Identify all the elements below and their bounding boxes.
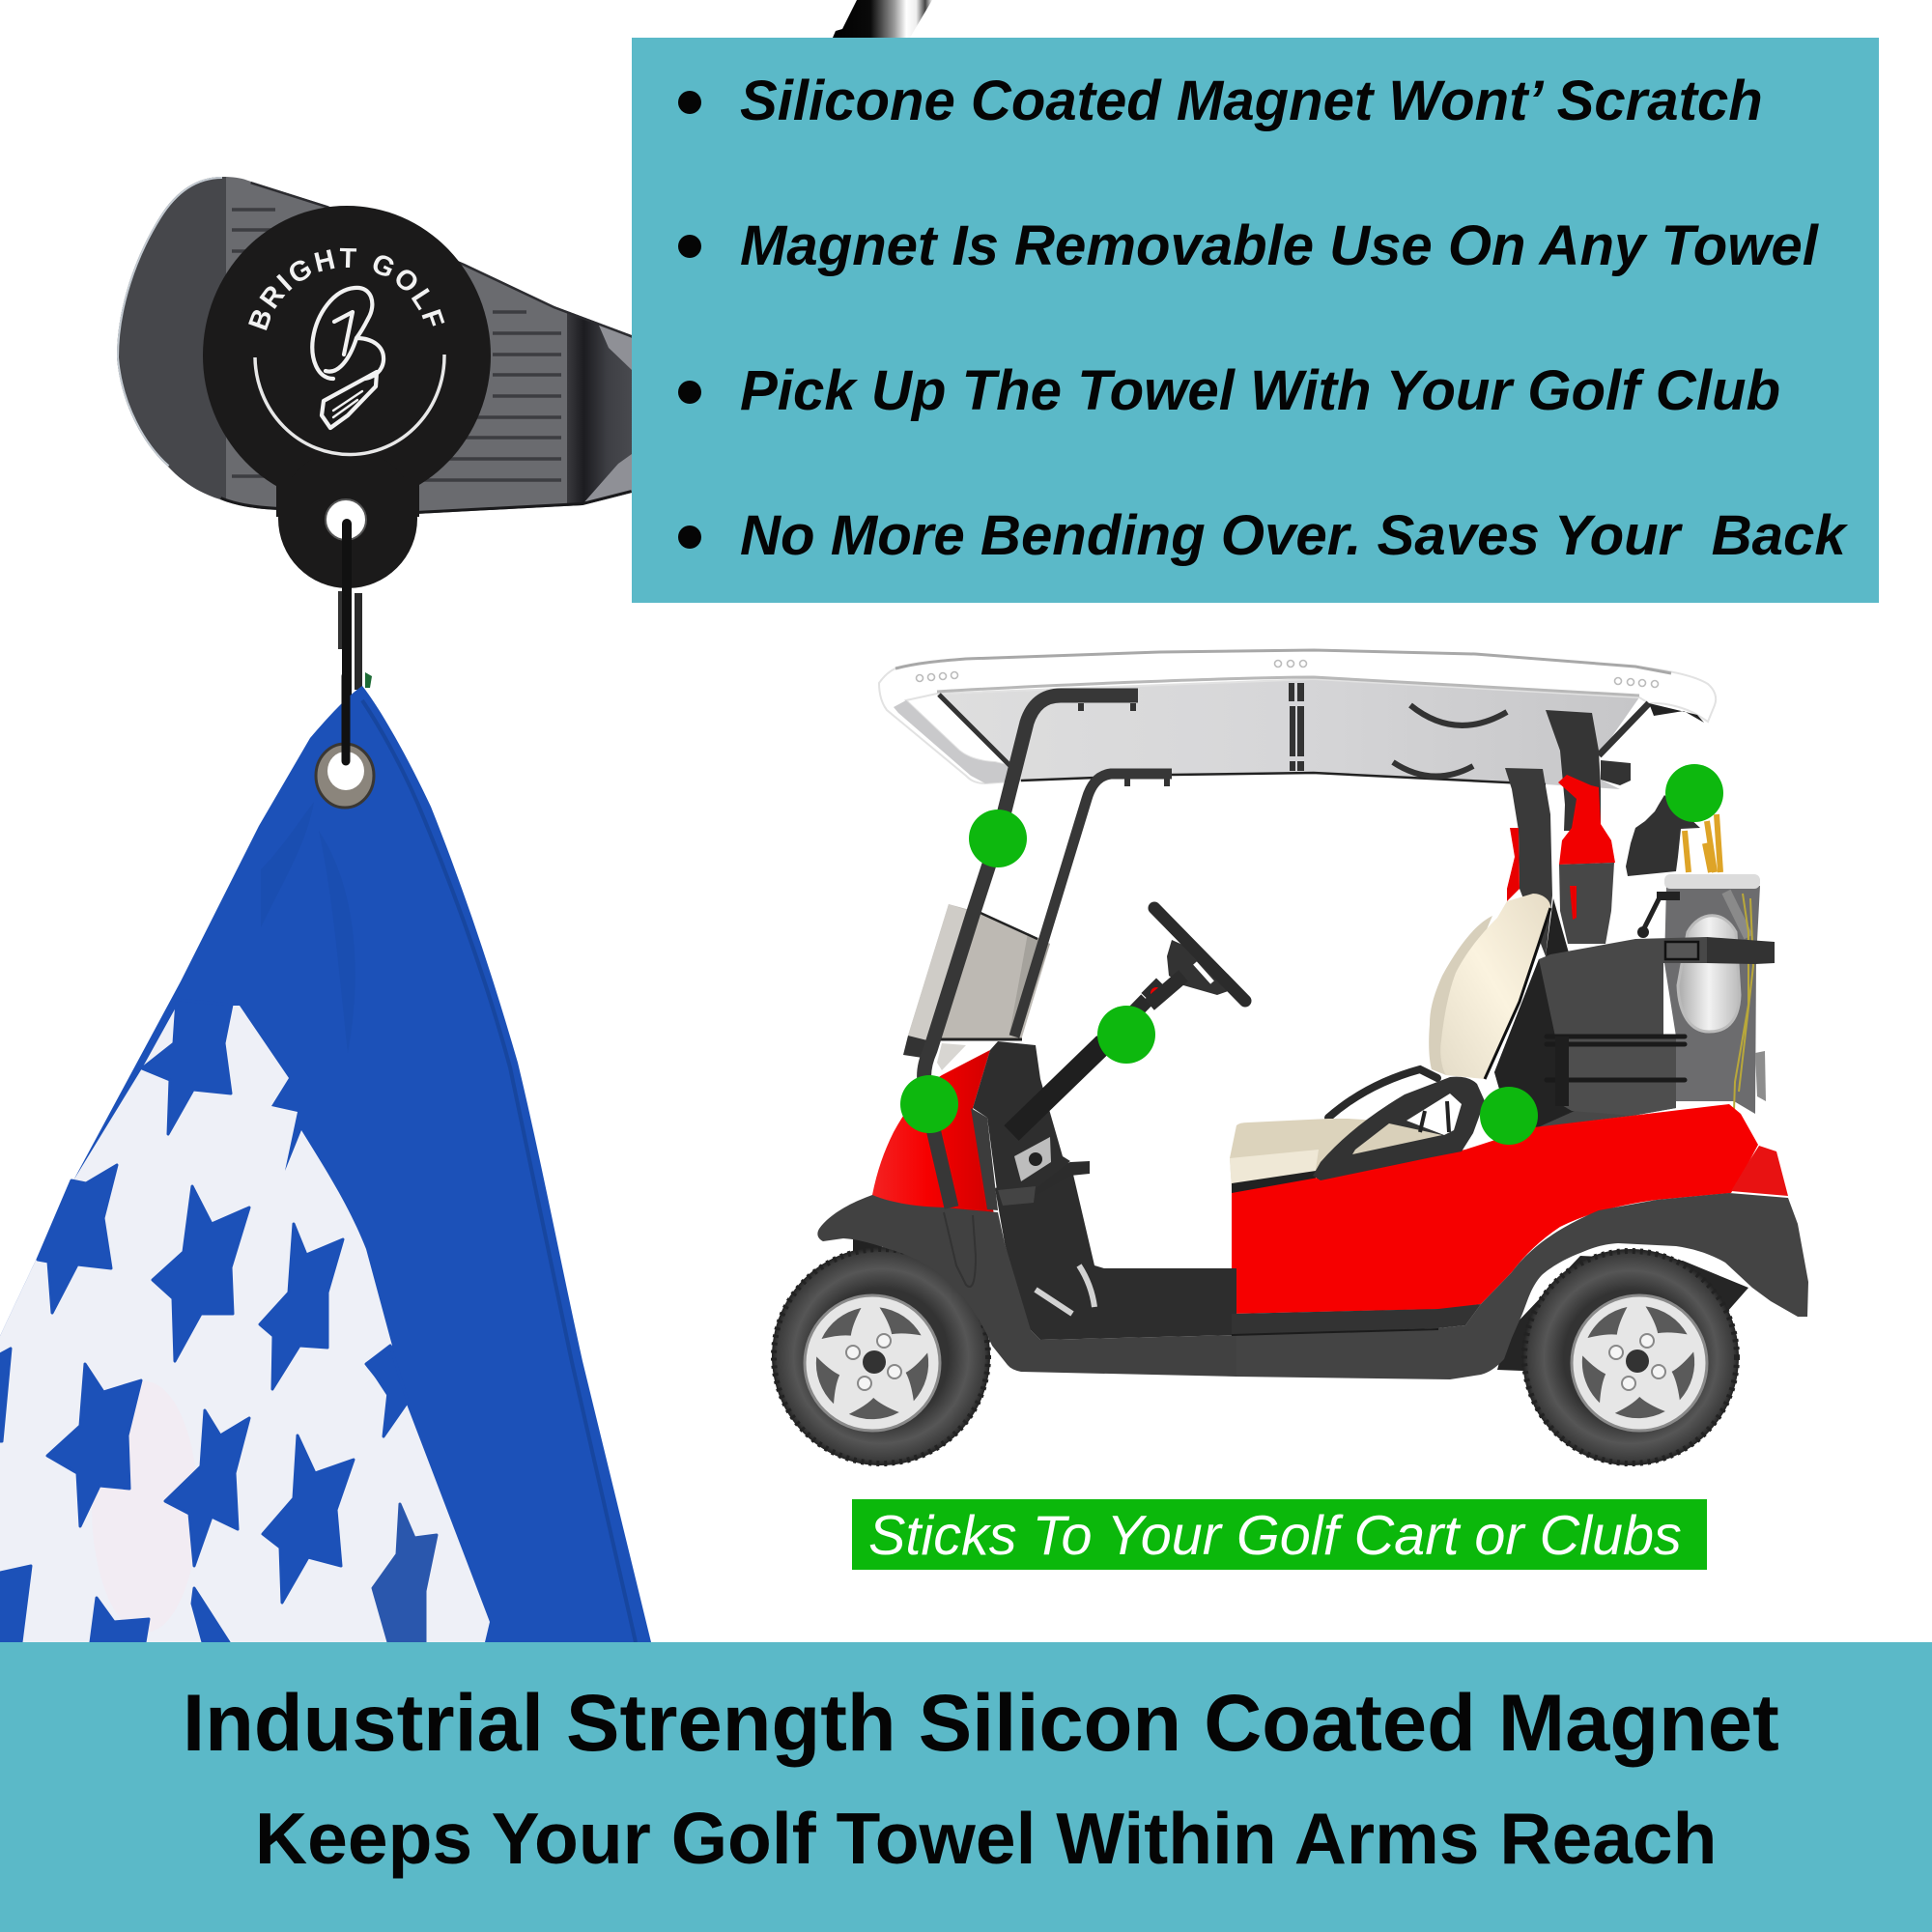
armrest	[1313, 1077, 1485, 1180]
front tire	[772, 1247, 990, 1465]
roof handles	[1393, 705, 1507, 777]
buckle	[1665, 942, 1698, 959]
front red cowl	[872, 1050, 995, 1219]
roof bottom line	[1021, 773, 1546, 784]
seat back	[1440, 894, 1550, 1079]
panel: top benefits	[632, 38, 1879, 603]
roof left inner lip	[894, 700, 1022, 783]
fender seam	[944, 1212, 976, 1287]
panel: bottom banner	[0, 1642, 1932, 1932]
steering wheel	[1154, 908, 1245, 1001]
rear red bit	[1507, 828, 1520, 901]
golf towel	[0, 676, 651, 1642]
roof top highlight line	[895, 650, 1671, 673]
magnet eyelet hole	[326, 499, 366, 540]
rear rim	[1572, 1295, 1707, 1431]
pedals	[1036, 1265, 1094, 1314]
bullet 2	[678, 235, 701, 258]
towel blue body	[0, 686, 651, 1642]
switch panel	[1014, 1137, 1051, 1181]
windshield top edge	[980, 913, 1037, 939]
golf club shafts	[1685, 814, 1720, 872]
windshield lower reflection	[937, 1043, 966, 1070]
front wheel	[772, 1247, 990, 1465]
towel white star field	[0, 1006, 490, 1642]
bullet 1	[678, 91, 701, 114]
callout: sticks to golf cart	[852, 1499, 1707, 1570]
magnet spot steering column	[1097, 1006, 1155, 1064]
windshield glass	[908, 904, 1050, 1040]
benefit 1: Silicone Coated Magnet Wont’ Scratch	[740, 70, 1763, 132]
golf club heads	[1626, 795, 1700, 876]
golf cart illustration	[772, 650, 1808, 1465]
towel stars	[0, 1000, 437, 1642]
golf bag body	[1664, 886, 1760, 1114]
magnet spot seat frame	[1480, 1087, 1538, 1145]
rear red piece	[1731, 1146, 1788, 1196]
roof centre straps	[1289, 683, 1304, 771]
rear wheel	[1522, 1249, 1739, 1465]
bottle	[1559, 863, 1614, 944]
steering button	[1141, 978, 1172, 1009]
seat back rear	[1429, 916, 1492, 1075]
roof underside	[937, 679, 1639, 789]
headline: Industrial Strength Silicon Coated Magnet	[183, 1678, 1779, 1768]
callout text: Sticks To Your Golf Cart or Clubs	[868, 1505, 1682, 1567]
under seat strip	[1232, 1171, 1316, 1200]
script B mark	[312, 288, 384, 428]
bottle strut	[1546, 898, 1570, 956]
golf bag pocket	[1678, 916, 1740, 1032]
red holder	[1558, 775, 1615, 865]
magnet spot cowl	[900, 1075, 958, 1133]
dark sill strip	[1232, 1304, 1481, 1335]
outer pillar	[924, 696, 1138, 1208]
outer rail pegs	[1081, 703, 1167, 786]
golf bag strap	[1726, 892, 1748, 937]
bullet 3	[678, 381, 701, 404]
cart floor	[995, 1162, 1236, 1340]
rear tire	[1522, 1249, 1739, 1465]
console shadow	[1494, 959, 1575, 1132]
carabiner top inside hole	[342, 524, 352, 591]
front wheel well shadow	[853, 1239, 882, 1259]
roof brace left	[939, 695, 1012, 768]
armrest opening lower	[1352, 1123, 1442, 1154]
logo arc	[255, 355, 444, 455]
golf club head	[106, 164, 635, 522]
towel shading folds	[261, 802, 355, 1053]
windshield right pane	[1009, 933, 1050, 1034]
dash strip	[971, 1108, 998, 1210]
towel pink tint	[92, 1381, 198, 1633]
golf club shaft	[833, 0, 932, 38]
subheadline: Keeps Your Golf Towel Within Arms Reach	[255, 1798, 1717, 1879]
magnet spot golf clubs	[1665, 764, 1723, 822]
benefit 4: No More Bending Over. Saves Your Back	[740, 504, 1848, 567]
second pillar	[1014, 774, 1172, 1037]
bullet 4	[678, 526, 701, 549]
benefit 3: Pick Up The Towel With Your Golf Club	[740, 359, 1780, 422]
steering hub	[1167, 940, 1236, 995]
benefit 2: Magnet Is Removable Use On Any Towel	[740, 214, 1820, 277]
rear fender and sill	[1236, 1193, 1808, 1379]
rear armrest	[1328, 1069, 1437, 1118]
storage box	[1555, 1037, 1676, 1116]
magnet disc with logo	[203, 206, 491, 588]
roof right tab	[1601, 760, 1631, 785]
windshield left pane	[908, 904, 969, 1040]
towel edge seam	[362, 700, 636, 1642]
inner rear post	[1505, 768, 1552, 956]
roof brace right	[1599, 703, 1649, 755]
golf bag clip	[1642, 894, 1662, 932]
rear roof post	[1546, 710, 1601, 831]
carabiner clip	[338, 522, 372, 715]
roof right tip shadow	[1649, 703, 1704, 723]
front rim	[805, 1295, 940, 1431]
red body panel	[1232, 1104, 1758, 1314]
roof shell	[879, 650, 1716, 783]
golf bag rim	[1664, 874, 1760, 889]
roof vent dots	[916, 661, 1658, 688]
front fender and sill	[817, 1195, 1236, 1377]
roof edge line	[937, 677, 1639, 696]
brand name: BRIGHT GOLF	[248, 247, 444, 330]
windshield base clamp	[903, 1036, 927, 1058]
rear console	[1494, 937, 1707, 1132]
steering column	[1011, 1043, 1104, 1133]
armrest opening upper	[1406, 1094, 1462, 1135]
towel grommet	[316, 676, 374, 808]
dash panel	[973, 1041, 1070, 1198]
dash shelf	[1037, 1161, 1090, 1195]
rear wheel well shadow	[1497, 1256, 1748, 1372]
seat base	[1230, 1119, 1442, 1188]
cup holder	[998, 1186, 1036, 1206]
magnet spot front pillar	[969, 810, 1027, 867]
